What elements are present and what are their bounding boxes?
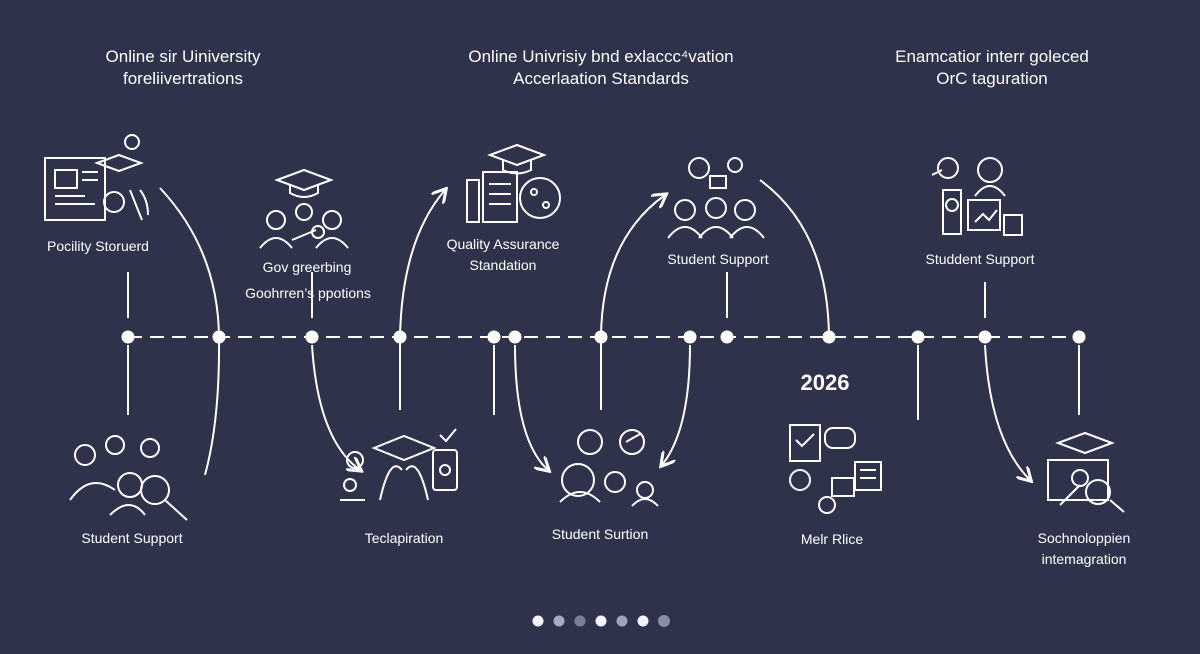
labels: intemagration bbox=[1042, 551, 1126, 567]
icon: governing group bbox=[260, 170, 348, 248]
heading: right bbox=[895, 47, 1089, 88]
heading: center: Accerlaation Standards bbox=[513, 69, 689, 88]
heading: center: Online Univrisiy bnd exlaccc⁴vation bbox=[468, 47, 734, 66]
labels: Teclapiration bbox=[365, 530, 443, 546]
heading: left: foreliivertrations bbox=[123, 69, 243, 88]
icons (line art) bbox=[45, 135, 1124, 520]
icon: technology integration bbox=[1048, 433, 1124, 512]
timeline axis bbox=[128, 180, 1079, 480]
heading: right: Enamcatior interr goleced bbox=[895, 47, 1089, 66]
icon: student support bottom bbox=[70, 436, 187, 520]
labels: Student Support bbox=[667, 251, 769, 267]
icon: melr rlice bbox=[790, 425, 881, 513]
labels: Quality Assurance bbox=[447, 236, 560, 252]
icon: integration person bbox=[932, 158, 1022, 235]
heading: right: OrC taguration bbox=[936, 69, 1048, 88]
icon: policy board bbox=[45, 135, 148, 220]
pagination dots bbox=[532, 615, 670, 627]
labels: Gov greerbing bbox=[263, 259, 351, 275]
labels: Studdent Support bbox=[926, 251, 1035, 267]
icon: quality assurance bbox=[467, 145, 560, 222]
labels: Melr Rlice bbox=[801, 531, 863, 547]
labels bbox=[47, 236, 1130, 567]
labels: Sochnoloppien bbox=[1038, 530, 1130, 546]
icon: student surtion bbox=[560, 430, 658, 506]
heading: left: Online sir Uiniversity bbox=[106, 47, 261, 66]
icon: student support group bbox=[668, 158, 764, 238]
labels: Pocility Storuerd bbox=[47, 238, 149, 254]
labels: Goohrren’s ppotions bbox=[245, 285, 371, 301]
heading: left bbox=[106, 47, 261, 88]
year label: 2026 bbox=[801, 370, 849, 395]
labels: Standation bbox=[470, 257, 536, 273]
labels: Student Surtion bbox=[552, 526, 648, 542]
heading: center bbox=[468, 47, 734, 88]
icon: graduation hands bbox=[340, 429, 457, 500]
timeline nodes bbox=[122, 330, 1086, 344]
labels: Student Support bbox=[81, 530, 183, 546]
